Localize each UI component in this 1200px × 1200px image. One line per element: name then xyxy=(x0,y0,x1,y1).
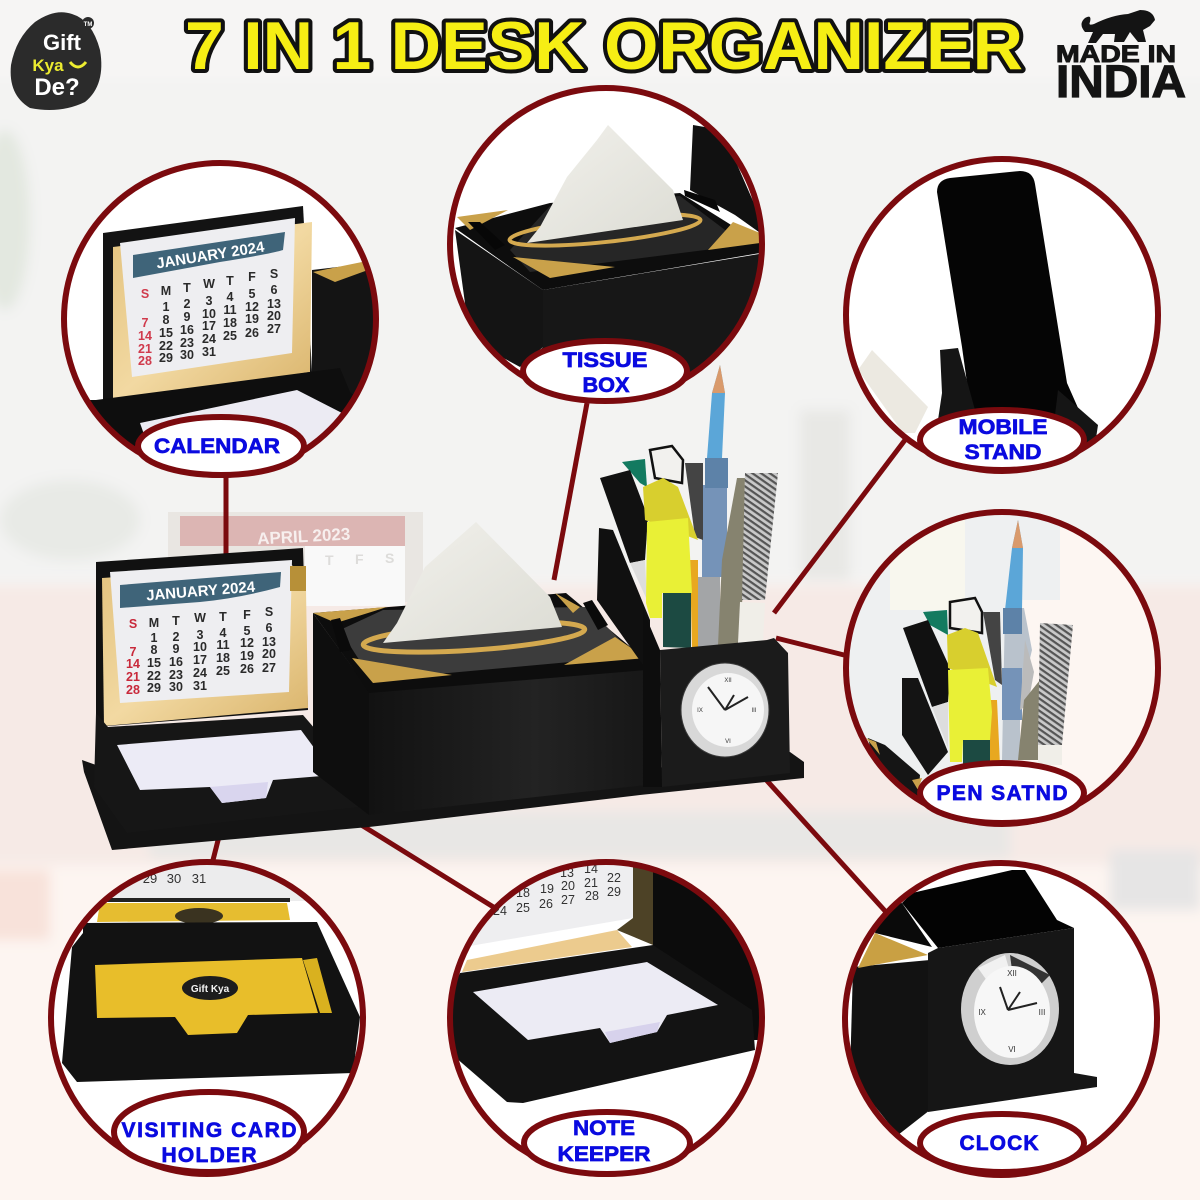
central product: 7 in 1 desk organizer xyxy=(82,365,804,850)
panel: note keeper: 19 xyxy=(540,882,554,896)
panel: calendar: 23 xyxy=(180,336,194,350)
panel: note keeper: 12 xyxy=(516,866,530,880)
clock: VI xyxy=(1008,1045,1016,1054)
panel: calendar: W xyxy=(203,277,215,291)
label: calendar xyxy=(138,417,304,475)
panel: calendar: 8 xyxy=(163,313,170,327)
faded background scene: F xyxy=(355,551,364,567)
panel: calendar: 13 xyxy=(267,297,281,311)
calendar stand xyxy=(96,548,308,727)
title: 7 IN 1 DESK ORGANIZER xyxy=(185,8,1023,84)
panel: tissue box xyxy=(450,88,770,401)
calendar stand: 23 xyxy=(169,668,183,682)
calendar stand: 27 xyxy=(262,661,276,675)
panel: calendar: 7 xyxy=(142,316,149,330)
calendar stand: 5 xyxy=(244,624,251,638)
panel: calendar: 12 xyxy=(245,300,259,314)
calendar stand: S xyxy=(265,605,273,619)
calendar stand: 13 xyxy=(262,635,276,649)
label: mobile stand: MOBILE xyxy=(958,416,1048,439)
label: mobile stand xyxy=(920,410,1084,470)
label: calendar: CALENDAR xyxy=(154,435,280,458)
clock: VI xyxy=(725,739,731,745)
panel: calendar: 31 xyxy=(202,345,216,359)
panel: calendar: 25 xyxy=(223,329,237,343)
calendar stand: 8 xyxy=(151,643,158,657)
panel: calendar: 18 xyxy=(223,316,237,330)
faded background scene: T xyxy=(325,552,334,568)
calendar stand: 14 xyxy=(126,657,140,671)
calendar stand: 31 xyxy=(193,679,207,693)
calendar stand: 29 xyxy=(147,681,161,695)
calendar stand: 10 xyxy=(193,640,207,654)
panel: note keeper: 13 xyxy=(560,866,574,880)
panel: note keeper xyxy=(447,850,770,1174)
logo: Gift Kya De: Kya xyxy=(32,56,64,75)
panel: visiting card holder xyxy=(51,855,363,1174)
panel: note keeper: 29 xyxy=(607,885,621,899)
mobile stand back xyxy=(597,528,650,700)
panel: calendar: 11 xyxy=(223,303,237,317)
faded background scene: APRIL 2023 xyxy=(257,525,351,548)
tissue box xyxy=(313,522,646,815)
panel: calendar: 15 xyxy=(159,326,173,340)
panel: note keeper: 28 xyxy=(585,889,599,903)
logo: Gift Kya De: De? xyxy=(34,74,80,101)
panel: calendar: 6 xyxy=(271,283,278,297)
clock: III xyxy=(751,708,757,714)
calendar stand: 7 xyxy=(130,645,137,659)
calendar stand: 30 xyxy=(169,680,183,694)
label: note keeper: NOTE xyxy=(573,1117,635,1140)
panel: calendar: 16 xyxy=(180,323,194,337)
calendar stand: S xyxy=(129,617,137,631)
calendar stand: M xyxy=(149,616,159,630)
logo: Made in India: MADE IN xyxy=(1056,41,1176,68)
clock: XII xyxy=(1007,969,1017,978)
panel: calendar: S xyxy=(141,287,149,301)
panel: calendar: 2 xyxy=(184,297,191,311)
calendar stand: 22 xyxy=(147,669,161,683)
calendar stand: 26 xyxy=(240,662,254,676)
clock: IX xyxy=(697,708,703,714)
panel: calendar: S xyxy=(270,267,278,281)
panel: calendar: 20 xyxy=(267,309,281,323)
panel: calendar: 5 xyxy=(249,287,256,301)
calendar stand: 1 xyxy=(151,631,158,645)
panel: calendar: 24 xyxy=(202,332,216,346)
panel: calendar: T xyxy=(183,281,191,295)
panel: note keeper: 21 xyxy=(584,876,598,890)
calendar stand: 6 xyxy=(266,621,273,635)
note tray xyxy=(94,713,359,833)
logo: Gift Kya De xyxy=(11,12,101,110)
panel: note keeper: 18 xyxy=(516,886,530,900)
tissue xyxy=(383,522,562,643)
calendar stand: 16 xyxy=(169,655,183,669)
panel: mobile stand xyxy=(846,159,1158,471)
label: note keeper xyxy=(524,1112,690,1174)
panel: calendar: T xyxy=(226,274,234,288)
calendar stand: JANUARY 2024 xyxy=(146,579,256,604)
calendar stand: 19 xyxy=(240,649,254,663)
panel: note keeper: 25 xyxy=(516,901,530,915)
clock xyxy=(961,953,1059,1065)
label: pen stand xyxy=(920,763,1084,823)
panel: note keeper: 20 xyxy=(561,879,575,893)
panel: calendar: 21 xyxy=(138,342,152,356)
panel: calendar: F xyxy=(248,270,256,284)
panel: visiting card holder: 29 xyxy=(143,871,157,886)
logo: Made in India xyxy=(1056,10,1186,107)
calendar stand: 28 xyxy=(126,683,140,697)
panel: calendar: 27 xyxy=(267,322,281,336)
panel: note keeper: 24 xyxy=(493,904,507,918)
clock: IX xyxy=(978,1008,986,1017)
calendar stand: 20 xyxy=(262,647,276,661)
label: visiting card holder xyxy=(114,1092,304,1172)
label: clock xyxy=(920,1114,1084,1172)
calendar stand: 24 xyxy=(193,666,207,680)
panel: calendar: JANUARY 2024 xyxy=(155,239,266,272)
panel: visiting card holder: Gift Kya xyxy=(191,984,230,995)
panel: note keeper: 27 xyxy=(561,893,575,907)
panel: calendar: 4 xyxy=(227,290,234,304)
icon: phone xyxy=(937,171,1078,414)
clock: XII xyxy=(724,678,732,684)
clock xyxy=(681,663,769,757)
label: visiting card holder: HOLDER xyxy=(162,1144,256,1167)
calendar stand: T xyxy=(172,614,180,628)
calendar stand: 15 xyxy=(147,656,161,670)
panel: visiting card holder: 31 xyxy=(192,871,206,886)
panel: calendar: 10 xyxy=(202,307,216,321)
panel: calendar: 28 xyxy=(138,354,152,368)
calendar stand: 25 xyxy=(216,664,230,678)
panel: note keeper: 26 xyxy=(539,897,553,911)
panel: calendar: 26 xyxy=(245,326,259,340)
label: tissue box xyxy=(523,341,687,401)
panel: pen stand xyxy=(845,510,1158,830)
panel: calendar: 3 xyxy=(206,294,213,308)
label: visiting card holder: VISITING CARD xyxy=(122,1119,296,1142)
label: tissue box: TISSUE xyxy=(562,349,648,372)
panel: note keeper: 22 xyxy=(607,871,621,885)
panel: calendar: 1 xyxy=(163,300,170,314)
label: clock: CLOCK xyxy=(960,1132,1038,1155)
calendar stand: 17 xyxy=(193,653,207,667)
label: tissue box: BOX xyxy=(582,374,630,397)
pens xyxy=(600,365,778,648)
panel: calendar: 19 xyxy=(245,312,259,326)
icon: lion xyxy=(1082,10,1155,43)
calendar stand: 12 xyxy=(240,636,254,650)
label: pen stand: PEN SATND xyxy=(936,782,1068,805)
calendar stand: 4 xyxy=(220,626,227,640)
clock: III xyxy=(1039,1008,1045,1017)
panel: calendar: 17 xyxy=(202,319,216,333)
logo: Made in India: INDIA xyxy=(1056,56,1186,107)
calendar stand: 9 xyxy=(173,642,180,656)
calendar stand: F xyxy=(243,608,251,622)
panel: calendar: 14 xyxy=(138,329,152,343)
label: mobile stand: STAND xyxy=(964,441,1042,464)
connector lines xyxy=(212,403,905,912)
base plate xyxy=(82,752,804,850)
calendar stand: 11 xyxy=(216,638,230,652)
panel: calendar xyxy=(60,163,380,480)
faded background scene: S xyxy=(385,550,394,566)
pen holder with clock xyxy=(643,610,790,787)
panel: clock xyxy=(845,863,1157,1175)
calendar stand: 3 xyxy=(197,628,204,642)
panel: calendar: 22 xyxy=(159,339,173,353)
panel: note keeper: 14 xyxy=(584,862,598,876)
calendar stand: 18 xyxy=(216,651,230,665)
calendar stand: 2 xyxy=(173,630,180,644)
logo: Gift Kya De: Gift xyxy=(43,30,82,55)
panel: calendar: M xyxy=(161,284,171,298)
calendar stand: T xyxy=(219,610,227,624)
calendar stand: 21 xyxy=(126,670,140,684)
panel: calendar: 9 xyxy=(184,310,191,324)
label: note keeper: KEEPER xyxy=(558,1143,650,1166)
panel: calendar: 30 xyxy=(180,348,194,362)
logo: Gift Kya De: TM xyxy=(84,22,92,28)
calendar stand: W xyxy=(194,611,206,625)
panel: calendar: 29 xyxy=(159,351,173,365)
panel: visiting card holder: 30 xyxy=(167,871,181,886)
